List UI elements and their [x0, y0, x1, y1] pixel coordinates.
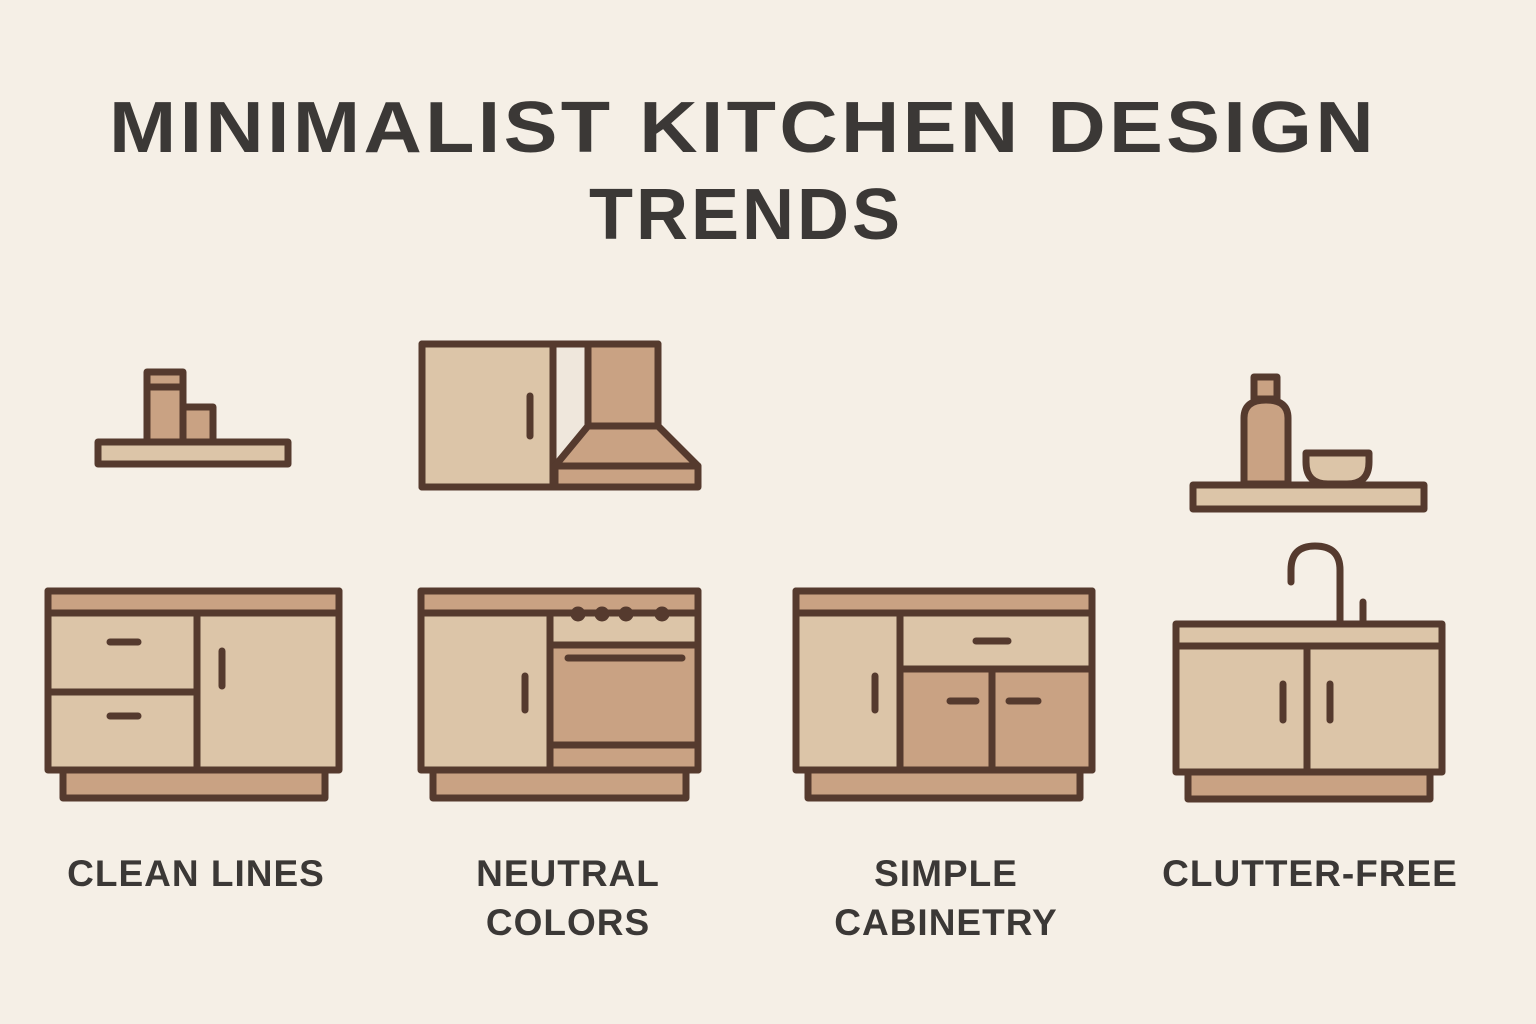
icon: right shelf with bottle and bowl	[1193, 377, 1424, 509]
icon: wall cabinet with range hood	[422, 344, 698, 487]
label: simple cabinetry	[834, 853, 1058, 943]
icon: cabinet with oven	[421, 591, 698, 798]
label: simple cabinetry: CABINETRY	[834, 902, 1058, 943]
label: neutral colors: COLORS	[486, 902, 650, 943]
title	[109, 88, 1377, 255]
title: MINIMALIST KITCHEN DESIGN	[109, 88, 1377, 168]
label: neutral colors	[476, 853, 660, 943]
title: TRENDS	[589, 175, 903, 255]
label: clean lines: CLEAN LINES	[67, 853, 325, 894]
icon: simple cabinetry	[796, 591, 1092, 798]
label: clutter-free: CLUTTER-FREE	[1162, 853, 1458, 894]
label: simple cabinetry: SIMPLE	[874, 853, 1018, 894]
icon: left shelf with jars	[98, 372, 288, 464]
label: neutral colors: NEUTRAL	[476, 853, 660, 894]
icon: cabinet clean lines	[48, 591, 339, 798]
icon: sink cabinet clutter-free	[1176, 546, 1442, 799]
